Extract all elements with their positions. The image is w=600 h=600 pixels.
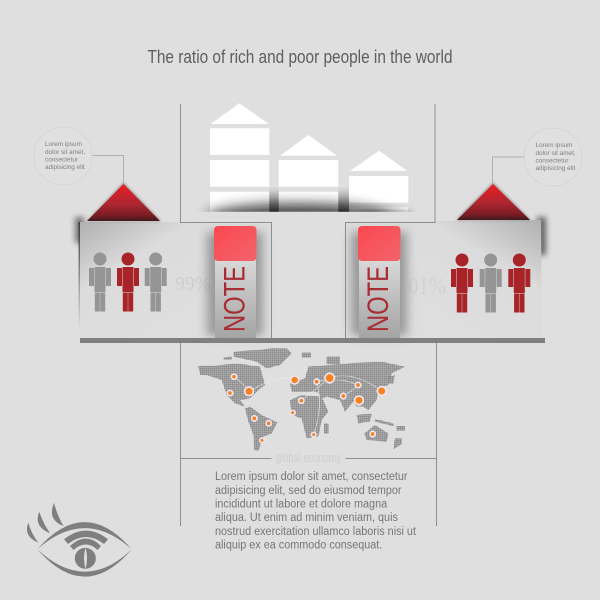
- label: 99%: 99%: [175, 273, 211, 295]
- note tab: left: NOTE: [218, 266, 251, 332]
- note tab: right: [351, 226, 407, 338]
- panel: lower frame lines: [180, 343, 436, 526]
- world map: [198, 348, 405, 451]
- people: right group: [451, 254, 530, 312]
- title: The ratio of rich and poor people in the world: [148, 46, 452, 67]
- body text: incididunt ut labore et dolore magna: [215, 498, 388, 511]
- note tab: left: [207, 226, 263, 338]
- dotted continents: [198, 348, 405, 451]
- shelf bar: [80, 338, 545, 343]
- callout: right bubble: consectetur: [536, 158, 569, 164]
- map network lines: [234, 376, 382, 435]
- market markers: [227, 373, 386, 443]
- icon: left red roof: [87, 182, 161, 221]
- icon: right red roof: [456, 182, 531, 220]
- callout: right bubble: adipisicing elit: [536, 165, 576, 172]
- body text: Lorem ipsum dolor sit amet, consectetur: [215, 471, 408, 483]
- chart: house bars: [200, 103, 414, 212]
- callout: left bubble: Lorem ipsum: [45, 141, 82, 148]
- person grey: [145, 252, 167, 312]
- panel: left card: [75, 182, 271, 338]
- icon: eye: [27, 503, 132, 577]
- house bar 1: [210, 103, 269, 212]
- person red: [117, 252, 139, 312]
- body text: nostrud exercitation ullamco laboris nisi ut: [215, 526, 417, 538]
- body text: aliqua. Ut enim ad minim veniam, quis: [215, 512, 398, 524]
- callout: right bubble: Lorem ipsum: [536, 142, 572, 149]
- callout: left bubble: consectetur: [45, 156, 79, 164]
- note tab: right: NOTE: [362, 266, 395, 332]
- label: global economy: global economy: [276, 450, 341, 465]
- callout: left bubble: [34, 127, 124, 185]
- body text: adipisicing elit, sed do eiusmod tempor: [215, 485, 402, 497]
- callout: left bubble: dolor sit amet,: [45, 149, 85, 156]
- label: 01%: 01%: [408, 274, 446, 300]
- house bar 3: [349, 151, 408, 212]
- person red: [508, 254, 530, 312]
- house bar 2: [279, 135, 338, 212]
- person red: [451, 254, 473, 312]
- panel: top frame lines: [180, 104, 435, 338]
- panel: right card: [345, 182, 546, 338]
- body text: [215, 471, 419, 552]
- callout: left bubble: adipisicing elit: [45, 164, 85, 171]
- callout: right bubble: [492, 128, 582, 186]
- person grey: [89, 252, 111, 312]
- body text: aliquip ex ea commodo consequat.: [215, 539, 382, 552]
- person grey: [480, 254, 502, 312]
- floor shadow: [200, 188, 414, 212]
- callout: right bubble: dolor sit amet,: [536, 150, 576, 157]
- people: left group: [89, 252, 167, 312]
